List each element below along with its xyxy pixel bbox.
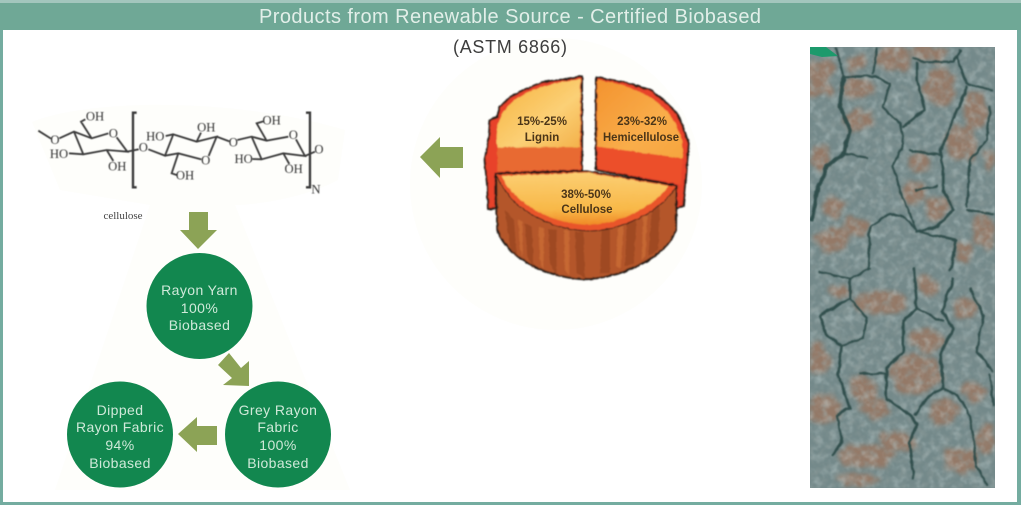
- circle: rayon yarn: Rayon Yarn: [161, 282, 238, 298]
- pie labels: Cellulose: [561, 204, 613, 216]
- pie labels: [517, 116, 679, 216]
- chemical labels: O: [229, 135, 238, 149]
- wedge: hemicellulose: [596, 77, 689, 209]
- circle: dipped rayon fabric: Dipped: [97, 402, 143, 418]
- caption: cellulose: cellulose: [103, 210, 143, 222]
- circle: dipped rayon fabric: Biobased: [89, 455, 151, 471]
- circle: dipped rayon fabric: Rayon Fabric: [76, 419, 164, 435]
- circle: rayon yarn: 100%: [181, 300, 218, 316]
- pie labels: 38%-50%: [561, 189, 611, 201]
- bark cracks: [812, 48, 993, 485]
- chemical labels: HO: [50, 147, 68, 161]
- pie chart: wood composition: [485, 76, 689, 279]
- circle: grey rayon fabric: Grey Rayon: [239, 402, 317, 418]
- chemical labels: O: [109, 126, 118, 140]
- arrow: cellulose to rayon yarn: [180, 212, 217, 249]
- chemical labels: O: [50, 133, 60, 147]
- chemical labels: O: [289, 128, 298, 142]
- chemical labels: O: [314, 142, 324, 156]
- circle: grey rayon fabric: 100%: [259, 437, 297, 453]
- header banner: [0, 0, 1021, 30]
- circle: grey rayon fabric: Fabric: [257, 419, 299, 435]
- arrow: wood to cellulose: [420, 137, 463, 178]
- chemical labels: N: [311, 183, 321, 197]
- chemical labels: HO: [235, 152, 253, 166]
- bark texture: [810, 47, 995, 488]
- pie labels: Hemicellulose: [603, 132, 679, 144]
- chemical labels: OH: [176, 168, 194, 182]
- chemical labels: OH: [284, 162, 303, 176]
- bark brown patches: [806, 46, 996, 487]
- cellulose chemical structure: [38, 109, 324, 197]
- pie labels: 23%-32%: [617, 116, 667, 128]
- circle: rayon yarn: Biobased: [169, 317, 230, 333]
- chemical labels: O: [201, 154, 210, 168]
- bark green corner mark: [810, 47, 838, 57]
- subtitle: (ASTM 6866): [453, 37, 567, 57]
- circle: grey rayon fabric: Biobased: [247, 455, 309, 471]
- chemical labels: [50, 109, 324, 197]
- chemical labels: OH: [86, 109, 104, 123]
- title: Products from Renewable Source - Certified Biobased: [259, 6, 761, 28]
- wedge: cellulose: [496, 171, 677, 279]
- chemical labels: OH: [108, 159, 126, 173]
- circle: grey rayon fabric: [225, 382, 331, 488]
- arrow: grey fabric to dipped fabric: [178, 417, 217, 452]
- chemical labels: OH: [262, 113, 281, 127]
- pie labels: 15%-25%: [517, 116, 567, 128]
- arrow: rayon yarn to grey fabric: [218, 353, 249, 386]
- chemical labels: OH: [197, 121, 215, 135]
- wedge: lignin: [485, 76, 582, 209]
- pie labels: Lignin: [525, 132, 559, 144]
- chemical labels: O: [139, 140, 148, 154]
- circle: dipped rayon fabric: 94%: [105, 437, 135, 453]
- background glow shapes: [32, 38, 702, 490]
- chemical labels: HO: [146, 129, 164, 143]
- photo: tree bark: [806, 46, 996, 488]
- circle: rayon yarn: [146, 253, 252, 359]
- circle: dipped rayon fabric: [67, 382, 173, 488]
